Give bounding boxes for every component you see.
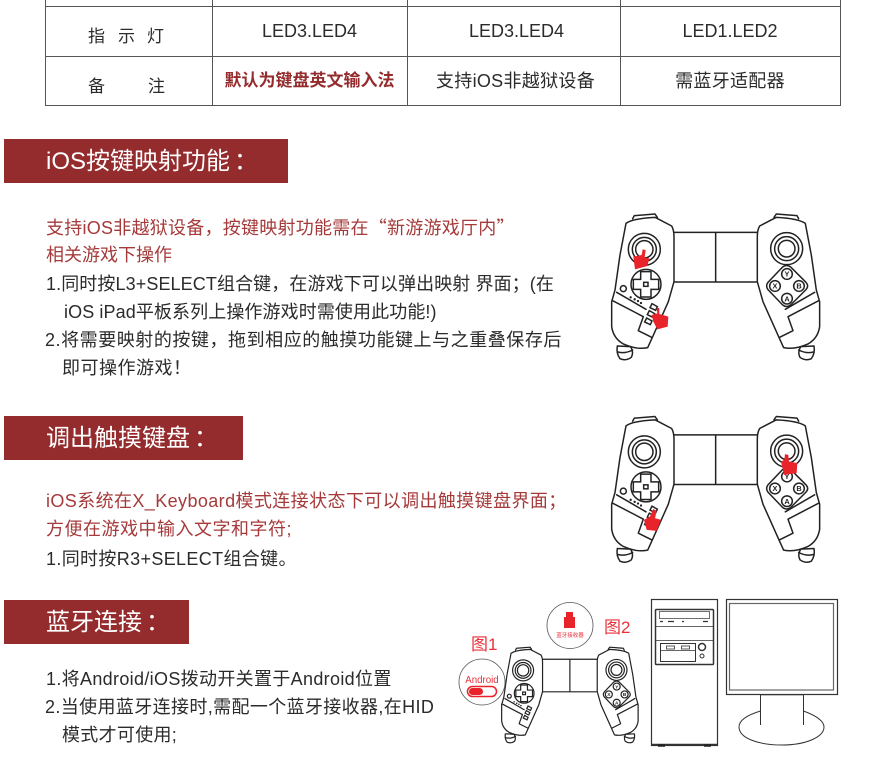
illustration: PC tower <box>651 600 718 746</box>
text: bluetooth instructions: 模式才可使用; <box>62 725 177 745</box>
text: iOS mapping instructions: 2.将需要映射的按键，拖到相应的触摸功能键上与之重叠保存后 <box>45 330 562 350</box>
table: 注 <box>148 77 165 96</box>
table: LED3.LED4 <box>262 21 357 41</box>
text: iOS mapping instructions: 1.同时按L3+SELECT组合键，在游戏下可以弹出映射 界面；(在 <box>46 274 554 294</box>
label: figure 2: 图2 <box>604 618 630 637</box>
text: touch keyboard instructions: 方便在游戏中输入文字和字符; <box>46 519 292 539</box>
table: 需蓝牙适配器 <box>675 71 785 91</box>
table: LED1.LED2 <box>682 21 778 41</box>
text: iOS mapping instructions: iOS iPad平板系列上操作游戏时需使用此功能!) <box>64 302 437 322</box>
heading: touch keyboard: 调出触摸键盘： <box>46 425 218 452</box>
heading: bluetooth <box>4 600 189 644</box>
gamepad illustration: bluetooth <box>502 647 638 743</box>
text: iOS mapping instructions <box>45 214 562 378</box>
text: touch keyboard instructions: iOS系统在X_Keyboard模式连接状态下可以调出触摸键盘界面； <box>46 491 567 511</box>
callout: Android switch <box>459 659 505 705</box>
icon: red hand on select <box>652 307 668 329</box>
text: iOS mapping instructions: 即可操作游戏！ <box>62 358 192 378</box>
table: 支持iOS非越狱设备 <box>436 71 595 91</box>
table: 示 <box>118 27 135 46</box>
gamepad illustration: R3 + SELECT <box>612 416 820 562</box>
callout: Android switch: Android <box>465 675 499 686</box>
text: iOS mapping instructions: 支持iOS非越狱设备，按键映射功能需在“新游游戏厅内” <box>46 214 515 240</box>
heading: iOS key mapping <box>4 139 288 183</box>
illustration: monitor <box>726 600 838 745</box>
text: bluetooth instructions: 1.将Android/iOS拨动开关置于Android位置 <box>46 669 392 689</box>
text: iOS mapping instructions: 相关游戏下操作 <box>46 245 172 265</box>
text: bluetooth instructions: 2.当使用蓝牙连接时,需配一个蓝牙接收器,在HID <box>45 697 434 717</box>
heading: bluetooth: 蓝牙连接： <box>46 609 170 636</box>
table: 灯 <box>147 27 164 46</box>
gamepad illustration: L3 + SELECT <box>612 214 820 360</box>
text: bluetooth instructions <box>45 669 434 745</box>
heading: iOS key mapping: iOS按键映射功能： <box>46 148 258 175</box>
icon: red hand on select button <box>644 509 661 531</box>
table: 备 <box>88 77 105 96</box>
callout: bluetooth receiver: 蓝牙接收器 <box>556 631 584 639</box>
icon: red hand on right stick <box>781 454 797 475</box>
table: 指 <box>88 27 105 46</box>
heading: touch keyboard <box>4 416 243 460</box>
label: figure 1: 图1 <box>471 635 497 654</box>
icon: red hand on left stick <box>633 249 649 269</box>
text: touch keyboard instructions <box>46 491 567 569</box>
table: LED3.LED4 <box>469 21 564 41</box>
callout: bluetooth receiver <box>547 602 593 648</box>
table <box>45 0 841 106</box>
text: touch keyboard instructions: 1.同时按R3+SELECT组合键。 <box>46 549 297 569</box>
table: 默认为键盘英文输入法 <box>224 71 394 90</box>
